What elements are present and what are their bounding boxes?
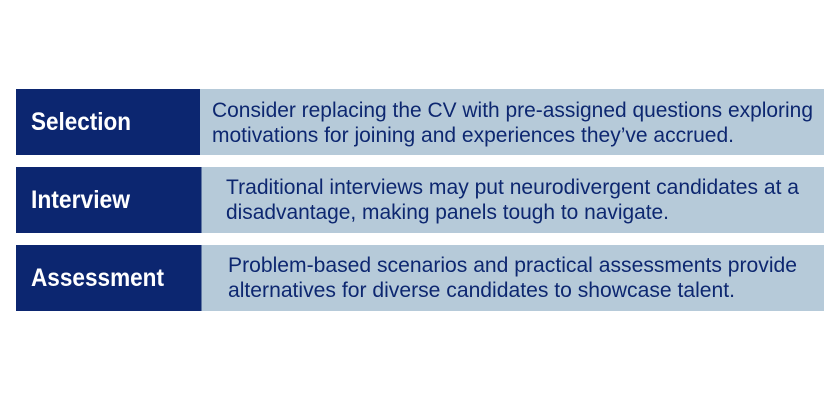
panel: Selection row	[16, 89, 824, 155]
text: Interview description: disadvantage, making panels tough to navigate.	[226, 201, 669, 224]
heading: Interview: Interview	[31, 186, 131, 214]
panel: Interview row	[16, 167, 824, 233]
panel: Assessment row	[16, 245, 824, 311]
text: Assessment description: Problem-based scenarios and practical assessments provide	[228, 254, 797, 277]
text: Interview description: Traditional interviews may put neurodivergent candidates at a	[226, 176, 799, 199]
text: Interview description	[226, 176, 799, 224]
heading: Selection: Selection	[31, 108, 131, 136]
text: Selection description: Consider replacing the CV with pre-assigned questions exploring	[212, 99, 813, 122]
Assessment description background	[202, 245, 824, 311]
heading: Assessment: Assessment	[31, 264, 165, 292]
Interview description background	[202, 167, 824, 233]
Selection description background	[200, 89, 824, 155]
Assessment label box	[16, 245, 202, 311]
Selection label box	[16, 89, 200, 155]
text: Selection description: motivations for joining and experiences they’ve accrued.	[212, 124, 734, 147]
text: Selection description	[212, 99, 813, 147]
text: Assessment description: alternatives for diverse candidates to showcase talent.	[228, 279, 735, 302]
Interview label box	[16, 167, 202, 233]
text: Assessment description	[228, 254, 797, 302]
